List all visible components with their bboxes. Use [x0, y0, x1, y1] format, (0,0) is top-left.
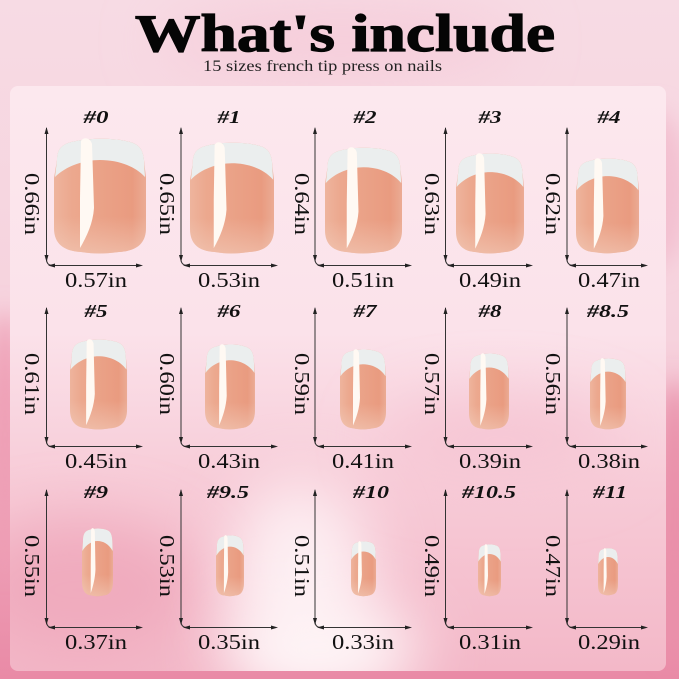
size #7: 0.41in	[332, 449, 395, 473]
size #2	[290, 107, 412, 292]
size #8: #8	[477, 301, 502, 321]
size #0	[20, 107, 146, 292]
size #8.5	[541, 301, 648, 473]
size #2: 0.51in	[332, 268, 395, 292]
size #0: #0	[82, 107, 108, 127]
size #1: 0.65in	[155, 173, 179, 236]
size #7: 0.59in	[290, 353, 314, 416]
size #7: #7	[352, 301, 378, 321]
size #10	[290, 482, 412, 654]
size #9.5: 0.53in	[155, 535, 179, 598]
size #9: #9	[83, 482, 108, 502]
size #4: 0.62in	[541, 173, 565, 236]
size #10: #10	[352, 482, 389, 502]
size #4	[541, 107, 648, 292]
size #9.5	[155, 482, 278, 654]
size #11: 0.47in	[541, 535, 565, 598]
size #8: 0.39in	[459, 449, 522, 473]
size #3: #3	[477, 107, 502, 127]
size #3: 0.49in	[459, 268, 522, 292]
size #5: 0.61in	[20, 353, 44, 416]
size #6: 0.43in	[198, 449, 261, 473]
size #10: 0.51in	[290, 535, 314, 598]
size #10: 0.33in	[332, 630, 395, 654]
size #4: 0.47in	[578, 268, 641, 292]
size #9: 0.37in	[65, 630, 128, 654]
size #1	[155, 107, 278, 292]
size #2: #2	[352, 107, 376, 127]
size #10.5: #10.5	[461, 482, 516, 502]
size #1: 0.53in	[198, 268, 261, 292]
size #10.5	[420, 482, 533, 654]
size #10.5: 0.49in	[420, 535, 444, 598]
size #6	[155, 301, 278, 473]
size #10.5: 0.31in	[459, 630, 522, 654]
size #4: #4	[596, 107, 620, 127]
size #11	[541, 482, 648, 654]
size #9.5: #9.5	[206, 482, 249, 502]
size #8: 0.57in	[420, 353, 444, 416]
size #11: 0.29in	[578, 630, 641, 654]
size #9.5: 0.35in	[198, 630, 261, 654]
size #1: #1	[216, 107, 240, 127]
size #2: 0.64in	[290, 173, 314, 236]
subtitle: 15 sizes french tip press on nails	[203, 58, 442, 75]
size #3: 0.63in	[420, 173, 444, 236]
size #6: #6	[216, 301, 240, 321]
size #7	[290, 301, 412, 473]
size #0: 0.57in	[65, 268, 128, 292]
size #5: 0.45in	[65, 449, 128, 473]
size #5	[20, 301, 143, 473]
size #6: 0.60in	[155, 353, 179, 416]
size #8.5: 0.56in	[541, 353, 565, 416]
size #11: #11	[592, 482, 627, 502]
size #3	[420, 107, 533, 292]
size #9: 0.55in	[20, 535, 44, 598]
size #9	[20, 482, 143, 654]
size #8.5: 0.38in	[578, 449, 641, 473]
size #5: #5	[83, 301, 108, 321]
size #8	[420, 301, 533, 473]
size #8.5: #8.5	[586, 301, 629, 321]
size #0: 0.66in	[20, 173, 44, 236]
title: What's include	[135, 5, 555, 63]
